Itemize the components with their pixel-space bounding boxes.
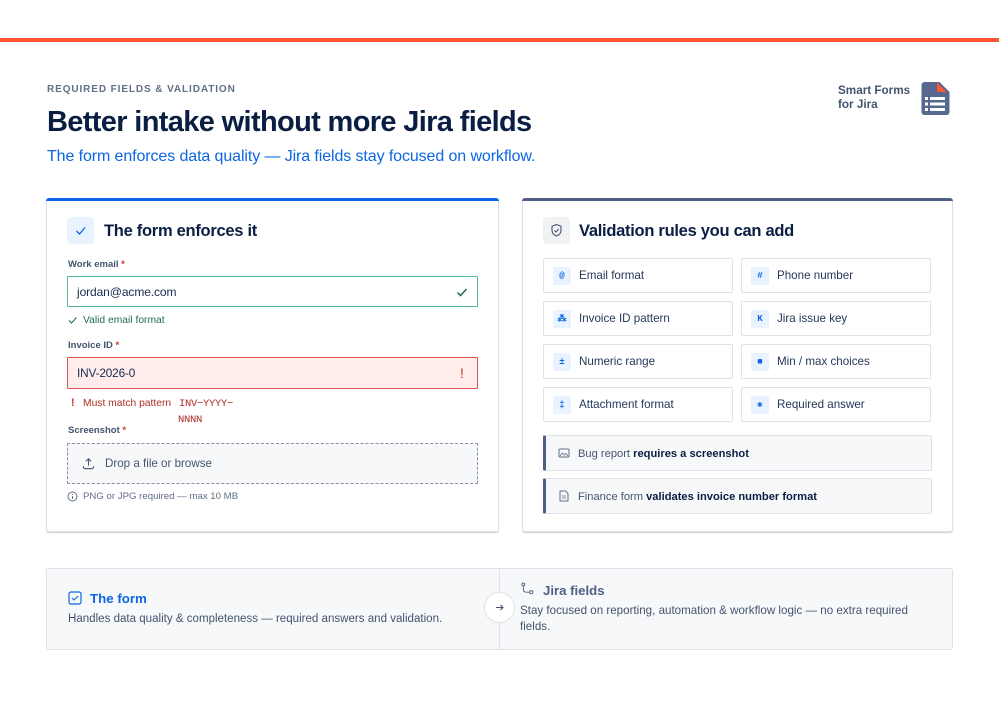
icon: upload [82, 458, 94, 470]
rule: invoice ID pattern: Invoice ID pattern [579, 312, 670, 325]
rule: required answer: ✱ [757, 400, 763, 410]
icon: route [522, 582, 534, 594]
valid input [67, 276, 478, 307]
rule: phone number: # [757, 270, 763, 280]
callout: finance form [543, 478, 932, 514]
validation error message [71, 397, 233, 426]
field label: Work email * [68, 259, 125, 270]
validation success message: Valid email format [83, 315, 165, 326]
invalid input [67, 357, 478, 389]
invalid input: INV-2026-0 [77, 366, 135, 380]
rule: Jira issue key [741, 301, 931, 336]
brand name [838, 84, 910, 110]
dashed dropzone: Drop a file or browse [105, 457, 212, 470]
divider [499, 569, 500, 649]
icon: check in blue tile [67, 217, 94, 244]
panel: the form enforces it [46, 198, 499, 532]
validation error message: NNNN [178, 414, 202, 426]
dashed dropzone [67, 443, 478, 484]
the form column [68, 591, 442, 625]
callout: finance form: Finance form validates invoice number format [578, 491, 817, 503]
brand: Smart Forms for Jira [838, 82, 950, 115]
field label: Invoice ID * [68, 340, 119, 351]
icon: checked box [68, 591, 82, 605]
valid input: jordan@acme.com [77, 285, 176, 299]
rule: numeric range [543, 344, 733, 379]
Jira fields column [520, 582, 908, 633]
field: work email [67, 259, 478, 326]
rule: attachment format [543, 387, 733, 422]
description: Handles data quality & completeness — required answers and validation. [68, 613, 442, 625]
rule: attachment format: ‡ [559, 400, 565, 410]
validation error message: INV−YYYY− [179, 398, 233, 410]
rule: email format: Email format [579, 269, 644, 282]
panel: responsibility comparison [46, 568, 953, 650]
panel heading: The form enforces it [104, 222, 257, 240]
field label: Screenshot * [68, 425, 126, 436]
callout: bug report: Bug report requires a screenshot [578, 448, 749, 460]
rule: min / max choices: ■ [757, 356, 763, 366]
rule: required answer [741, 387, 931, 422]
validation error message: Must match pattern [83, 398, 171, 409]
description: Stay focused on reporting, automation & workflow logic — no extra required fields. [520, 604, 908, 633]
rule: attachment format: Attachment format [579, 398, 674, 411]
rule: email format: @ [559, 270, 565, 280]
panel: validation rules you can add [522, 198, 953, 532]
rule: min / max choices [741, 344, 931, 379]
subtitle: The form enforces data quality — Jira fields stay focused on workflow. [47, 148, 535, 165]
rule: invoice ID pattern [543, 301, 733, 336]
rule: Jira issue key: Jira issue key [777, 312, 847, 325]
brand name: for Jira [838, 98, 878, 110]
icon: form document [922, 82, 950, 115]
rule: Jira issue key: K [757, 314, 763, 324]
rule: email format [543, 258, 733, 293]
heading: The form [90, 591, 147, 606]
rule: required answer: Required answer [777, 398, 865, 411]
field: invoice ID [67, 340, 478, 426]
rule: invoice ID pattern: ⁂ [558, 314, 566, 324]
file hint: PNG or JPG required — max 10 MB [83, 491, 238, 502]
rule: numeric range: ± [559, 356, 565, 366]
title: Better intake without more Jira fields [47, 106, 532, 138]
rule: numeric range: Numeric range [579, 355, 655, 368]
panel heading: Validation rules you can add [579, 222, 794, 240]
validation error message: ! [71, 397, 75, 409]
rule: phone number: Phone number [777, 269, 853, 282]
top accent bar [0, 38, 999, 42]
brand name: Smart Forms [838, 84, 910, 97]
icon: shield check [543, 217, 570, 244]
rule: phone number [741, 258, 931, 293]
field: screenshot upload [67, 425, 478, 502]
arrow badge [484, 592, 515, 623]
rule: min / max choices: Min / max choices [777, 355, 870, 368]
heading: Jira fields [543, 583, 605, 598]
header: eyebrow, title and subtitle [47, 84, 535, 165]
eyebrow: REQUIRED FIELDS & VALIDATION [47, 84, 236, 95]
invalid input: ! [460, 365, 464, 381]
callout: bug report [543, 435, 932, 471]
